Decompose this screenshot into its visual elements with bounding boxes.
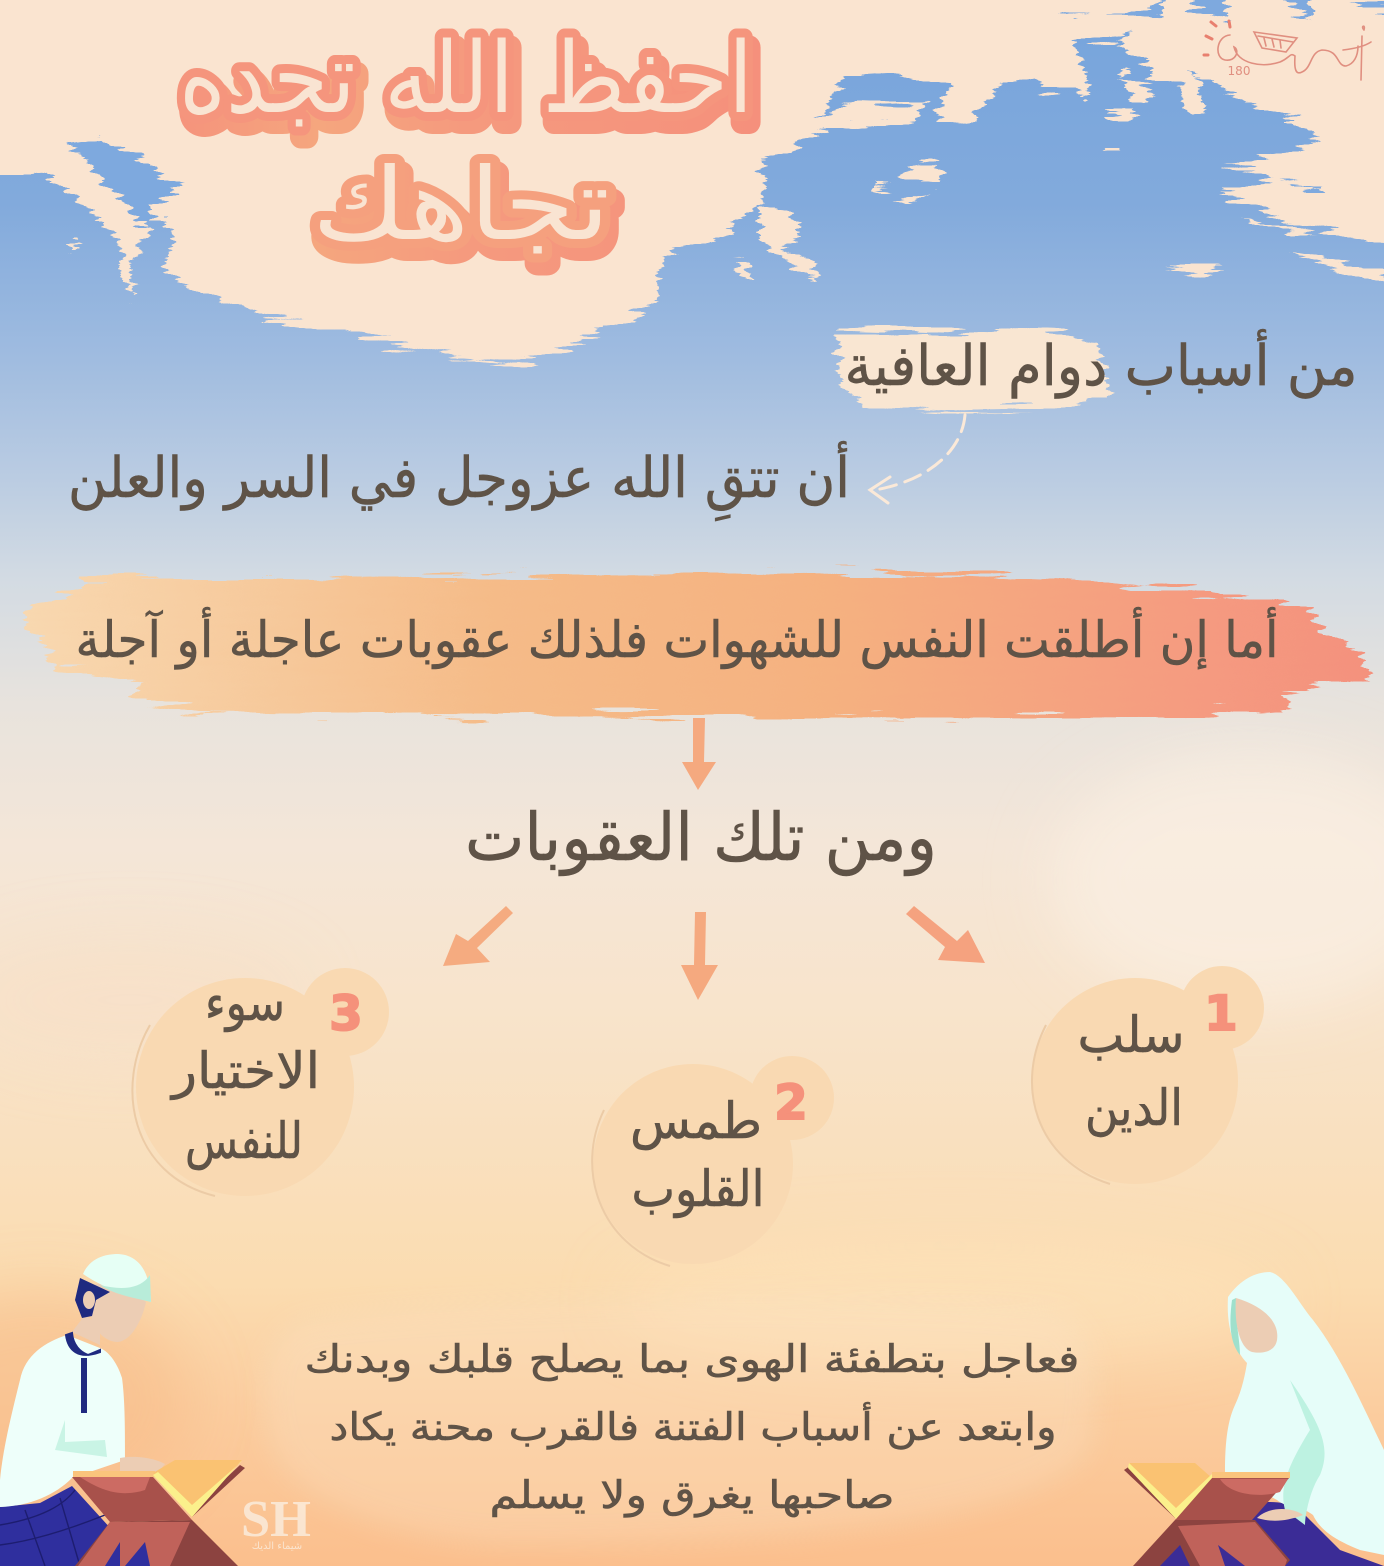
- figure: woman reading: [1124, 1272, 1384, 1566]
- closing text: [304, 1337, 1080, 1518]
- circle 3 text: الاختيار: [169, 1042, 320, 1100]
- warm and pale cloud haze: [0, 750, 1384, 1510]
- circle 1 text: سلب: [1078, 1006, 1184, 1064]
- circle 1 text: الدين: [1085, 1079, 1183, 1137]
- title line 2: تجاهك: [317, 156, 615, 273]
- arrow: down from band: [682, 718, 716, 790]
- title line 1: احفظ الله تجده: [184, 32, 758, 146]
- badge number 2: 2: [774, 1075, 808, 1131]
- title line 2: تجاهك: [312, 146, 610, 263]
- circle 3 text: سوء: [205, 974, 285, 1032]
- circle 1 text: [1078, 1006, 1184, 1137]
- arrow: left: [443, 906, 513, 966]
- circle 2 text: القلوب: [632, 1160, 764, 1218]
- arrow: centre: [681, 912, 718, 1000]
- arrow: dashed curved arrow: [870, 415, 965, 503]
- highlight behind first line: [836, 329, 1110, 411]
- badge number 3: 3: [329, 986, 363, 1042]
- closing text: صاحبها يغرق ولا يسلم: [490, 1473, 894, 1518]
- circle 2: sealing of hearts: [592, 1056, 834, 1266]
- logo: brand signature: 180: [1228, 64, 1250, 78]
- logo: SH watermark: شيماء الديك: [252, 1541, 302, 1552]
- arrow: right: [906, 906, 985, 963]
- title line 1: احفظ الله تجده: [179, 22, 753, 136]
- panel: gradient brush band: [28, 572, 1370, 718]
- cloud behind closing text: [263, 1298, 1096, 1545]
- circle 2 text: طمس: [630, 1092, 762, 1150]
- figure: man reading: [0, 1254, 245, 1566]
- badge number 1: 1: [1204, 986, 1238, 1042]
- circle 3: poor choice for oneself: [132, 968, 389, 1196]
- heading: among these punishments: ومن تلك العقوبات: [465, 799, 937, 876]
- logo: brand signature: [1204, 21, 1371, 80]
- circle 3 text: [169, 974, 320, 1170]
- text: causes of lasting wellbeing: من أسباب دوام العافية: [844, 329, 1358, 399]
- circle 3 text: للنفس: [185, 1112, 303, 1170]
- text: fear of God in secret and in public: أن تتقِ الله عزوجل في السر والعلن: [68, 441, 850, 521]
- circle 2 text: [630, 1092, 764, 1218]
- blue brush streaks in cream area: [61, 0, 1384, 226]
- closing text: فعاجل بتطفئة الهوى بما يصلح قلبك وبدنك: [304, 1337, 1080, 1382]
- text: band statement: أما إن أطلقت النفس للشهوات فلذلك عقوبات عاجلة أو آجلة: [76, 607, 1278, 670]
- panel: cream brush shape behind title: [0, 0, 1384, 363]
- logo: SH watermark: SH: [241, 1491, 311, 1548]
- closing text: وابتعد عن أسباب الفتنة فالقرب محنة يكاد: [330, 1402, 1056, 1450]
- circle 1: loss of faith: [1032, 966, 1264, 1184]
